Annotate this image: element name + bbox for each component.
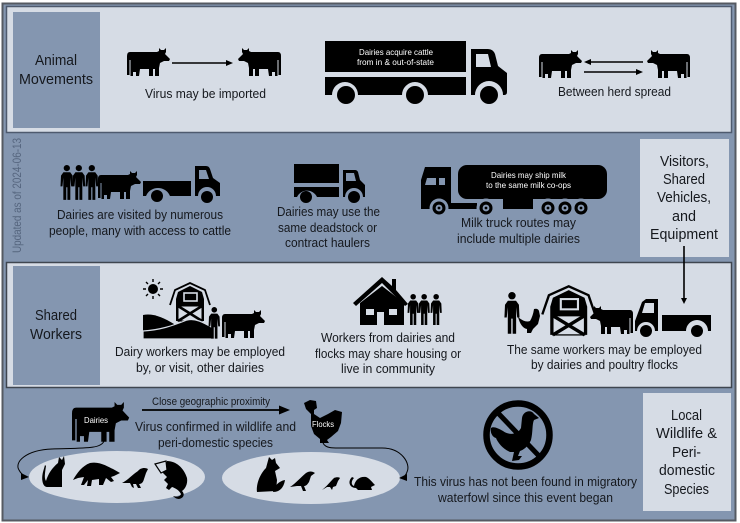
text: not found in waterfowl: This virus has not been found in migratory bbox=[414, 474, 638, 489]
arrow: dairies to wildlife bbox=[18, 441, 104, 480]
icon: large cattle truck: from in & out-of-state bbox=[357, 57, 434, 67]
heading: shared workers: Shared bbox=[35, 307, 77, 324]
text: dairy workers: by, or visit, other dairies bbox=[136, 360, 264, 375]
heading: local wildlife and peri-domestic species: Local bbox=[671, 407, 702, 424]
heading: local wildlife and peri-domestic species: Species bbox=[664, 481, 709, 498]
text: workers share housing bbox=[315, 330, 462, 376]
icon: flock chicken: Flocks bbox=[312, 419, 334, 429]
text: workers share housing: flocks may share housing or bbox=[315, 346, 462, 361]
icon: fox bbox=[257, 457, 280, 492]
text: virus confirmed: Virus confirmed in wildlife and bbox=[135, 419, 296, 434]
text: virus confirmed: peri-domestic species bbox=[158, 435, 273, 450]
icon: deadstock truck bbox=[294, 164, 365, 203]
heading: local wildlife and peri-domestic species: domestic bbox=[659, 462, 715, 479]
panel: visitors, shared vehicles, equipment bbox=[10, 138, 729, 257]
icon: flock chicken bbox=[304, 400, 342, 443]
text: deadstock haulers: contract haulers bbox=[285, 235, 370, 250]
icon: opossum bbox=[163, 461, 187, 499]
icon: people, cow and pickup bbox=[61, 165, 220, 203]
text: not found in waterfowl bbox=[414, 474, 638, 505]
text: virus may be imported: Virus may be imported bbox=[145, 86, 266, 101]
heading: animal movements bbox=[13, 12, 100, 128]
text: dairies are visited bbox=[49, 207, 231, 238]
text: workers share housing: live in community bbox=[341, 361, 436, 376]
icon: barn on hill with worker and cow bbox=[143, 283, 265, 339]
panel: shared workers bbox=[6, 262, 732, 388]
arrow: close geographic proximity bbox=[142, 396, 290, 414]
heading: visitors, shared vehicles, and equipment: Shared bbox=[663, 171, 705, 188]
text: milk truck routes bbox=[457, 215, 580, 246]
icon: milk tanker truck: to the same milk co-ops bbox=[486, 180, 571, 190]
heading: animal movements: Movements bbox=[19, 71, 93, 88]
arrow: flocks to wildlife bbox=[323, 443, 408, 481]
icon: virus import cows and arrow bbox=[127, 48, 281, 76]
icon: dairy cow: Dairies bbox=[84, 415, 108, 425]
icon: sun bbox=[143, 279, 163, 299]
heading: animal movements: Animal bbox=[35, 52, 77, 69]
icon: cat bbox=[42, 456, 65, 487]
text: dairy workers bbox=[115, 344, 285, 375]
icon: bird bbox=[290, 472, 315, 491]
panel: animal movements bbox=[6, 6, 732, 132]
heading: local wildlife and peri-domestic species: Peri- bbox=[672, 444, 701, 461]
text: deadstock haulers bbox=[277, 204, 380, 250]
text: deadstock haulers: Dairies may use the bbox=[277, 204, 380, 219]
text: deadstock haulers: same deadstock or bbox=[278, 220, 378, 235]
heading: visitors, shared vehicles, and equipment: Equipment bbox=[650, 226, 719, 243]
panel: local wildlife and peri-domestic species bbox=[18, 393, 731, 511]
icon: large cattle truck: Dairies acquire cattle bbox=[359, 47, 433, 57]
icon: house and workers bbox=[353, 277, 442, 325]
text: same workers bbox=[507, 342, 702, 372]
text: dairies are visited: people, many with access to cattle bbox=[49, 223, 231, 238]
icon: between herd cows and arrows bbox=[539, 50, 690, 78]
text: not found in waterfowl: waterfowl since this event began bbox=[437, 490, 613, 505]
text: dairies are visited: Dairies are visited by numerous bbox=[57, 207, 223, 222]
heading: visitors, shared vehicles, and equipment bbox=[640, 139, 729, 257]
icon: no waterfowl bbox=[486, 404, 550, 466]
text: between herd spread: Between herd spread bbox=[558, 84, 671, 99]
heading: visitors, shared vehicles, and equipment: Vehicles, bbox=[657, 189, 711, 206]
text: virus confirmed bbox=[135, 419, 296, 450]
arrow: equipment to shared workers bbox=[681, 246, 687, 304]
heading: visitors, shared vehicles, and equipment: Visitors, bbox=[660, 153, 709, 170]
icon: worker, chicken, barn, cow and pickup bbox=[504, 286, 711, 337]
arrow: close geographic proximity: Close geographic proximity bbox=[152, 396, 270, 408]
text: milk truck routes: include multiple dairies bbox=[457, 231, 580, 246]
wildlife group one bbox=[29, 451, 205, 503]
heading: local wildlife and peri-domestic species bbox=[643, 393, 731, 511]
text: dairy workers: Dairy workers may be employed bbox=[115, 344, 285, 359]
text: milk truck routes: Milk truck routes may bbox=[461, 215, 577, 230]
icon: milk tanker truck: Dairies may ship milk bbox=[491, 170, 567, 180]
icon: raccoon bbox=[73, 463, 120, 486]
icon: rat bbox=[349, 477, 375, 490]
text: same workers: The same workers may be employed bbox=[507, 342, 702, 357]
icon: milk tanker truck bbox=[421, 165, 607, 218]
heading: shared workers: Workers bbox=[30, 326, 82, 343]
heading: shared workers bbox=[13, 266, 100, 385]
wildlife group two bbox=[222, 452, 400, 504]
text: workers share housing: Workers from dairies and bbox=[321, 330, 455, 345]
icon: crow bbox=[122, 468, 148, 488]
icon: small bird bbox=[322, 477, 340, 490]
date note: Updated as of 2024-06-13 bbox=[10, 138, 24, 253]
text: same workers: by dairies and poultry flocks bbox=[531, 357, 678, 372]
heading: visitors, shared vehicles, and equipment: and bbox=[672, 208, 696, 225]
icon: large cattle truck bbox=[325, 41, 507, 104]
heading: local wildlife and peri-domestic species: Wildlife & bbox=[656, 425, 717, 442]
icon: dairy cow bbox=[72, 402, 129, 442]
